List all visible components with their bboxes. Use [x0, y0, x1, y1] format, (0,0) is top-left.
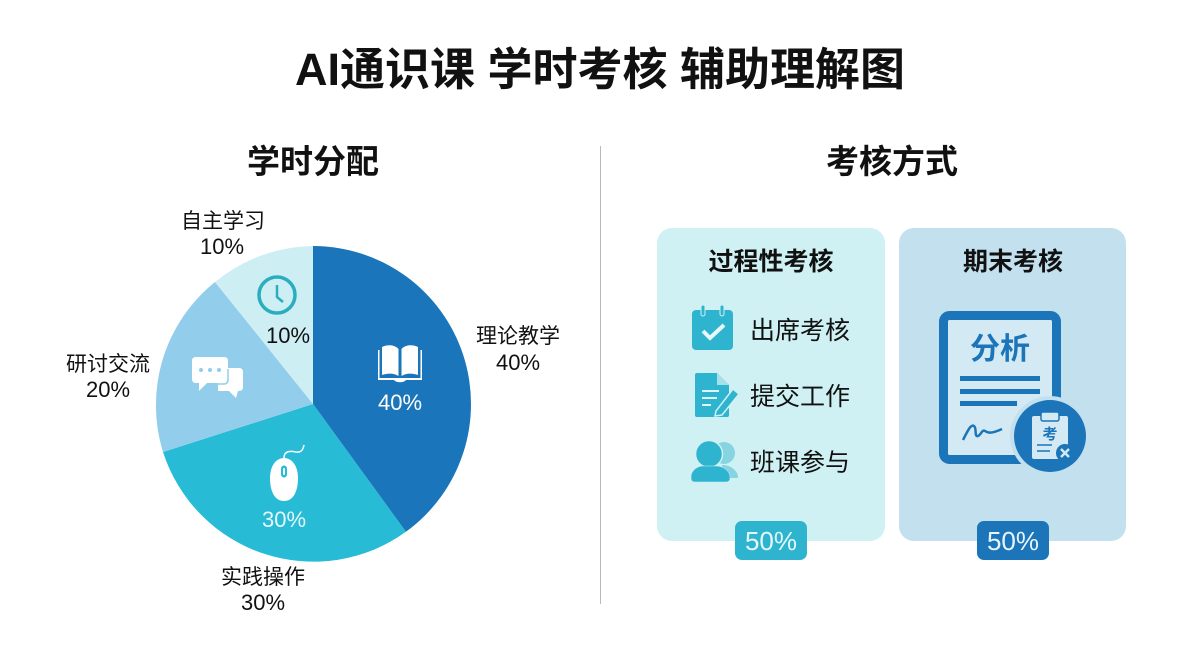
label: practice [221, 566, 305, 615]
label: discussion [66, 353, 150, 402]
icon: chat bubbles [192, 357, 243, 398]
card: final assessment [899, 228, 1126, 560]
badge: 50% [977, 521, 1049, 560]
label: discussion: 研讨交流 [66, 353, 150, 376]
card heading: 期末考核 [963, 248, 1063, 276]
label: self study: 自主学习 [181, 210, 265, 233]
slice: theory 40% [313, 246, 471, 532]
right panel: assessment [657, 143, 1126, 560]
icon: document and pencil [695, 373, 739, 417]
slice: self study 10% [215, 246, 313, 404]
value: 40%: 40% [378, 390, 422, 415]
label: self study [181, 210, 265, 259]
value: 30%: 30% [262, 507, 306, 532]
icon: mouse [270, 445, 304, 501]
label: practice: 实践操作 [221, 566, 305, 589]
value: 10%: 10% [266, 323, 310, 348]
card background [899, 228, 1126, 541]
pie chart [156, 246, 471, 562]
icon: exam clipboard badge: 考 [1042, 426, 1058, 443]
icon: open book [378, 345, 422, 382]
item: class participation: 班课参与 [750, 449, 850, 477]
label: theory: 理论教学 [476, 325, 560, 348]
item: submit work: 提交工作 [750, 383, 850, 411]
icon: calendar check [692, 305, 733, 350]
item: attendance: 出席考核 [750, 317, 850, 345]
title: AI通识课 学时考核 辅助理解图 [295, 44, 905, 95]
card: process assessment [657, 228, 885, 560]
icon: people [691, 440, 738, 482]
badge: 50% [735, 521, 807, 560]
icon: clock [259, 277, 295, 313]
card heading: 过程性考核 [708, 248, 834, 276]
heading: hours allocation: 学时分配 [247, 143, 379, 180]
label: theory: 40% [496, 350, 540, 375]
card background [657, 228, 885, 541]
badge: 50%: 50% [987, 526, 1039, 556]
left panel: hours allocation [66, 143, 560, 615]
badge: 50%: 50% [745, 526, 797, 556]
label: discussion: 20% [86, 377, 130, 402]
slice: discussion 20% [156, 282, 313, 452]
heading: assessment: 考核方式 [826, 143, 958, 180]
label: self study: 10% [200, 234, 244, 259]
icon: analysis document: 分析 [970, 333, 1030, 366]
divider [600, 146, 601, 604]
label: theory [476, 325, 560, 375]
icon: analysis document [944, 316, 1056, 460]
slice: practice 30% [163, 404, 406, 562]
label: practice: 30% [241, 590, 285, 615]
icon: exam clipboard badge [1010, 396, 1090, 476]
